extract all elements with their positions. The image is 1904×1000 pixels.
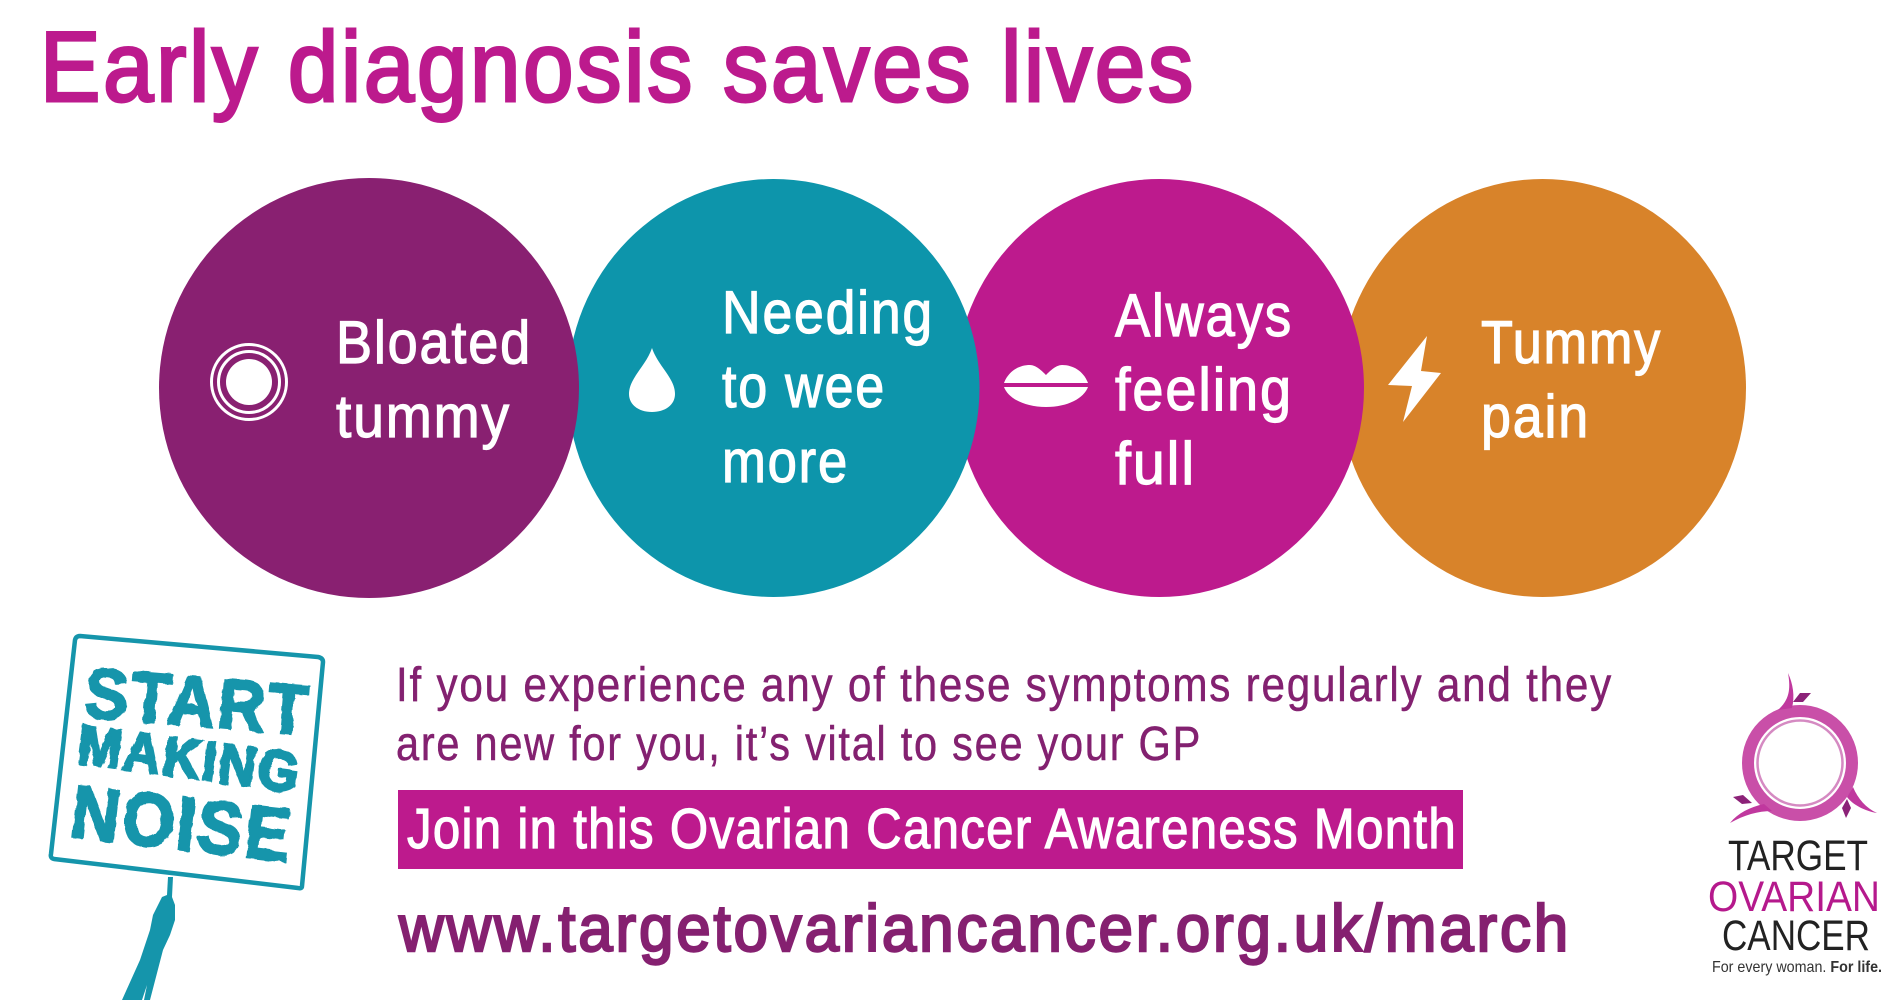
placard text: MAKING [74, 712, 305, 805]
label: needing to wee more: to wee [722, 353, 886, 420]
label: tummy pain: Tummy [1481, 309, 1662, 376]
icon: concentric target [212, 344, 286, 420]
logo tagline: For every woman. For life. [1712, 959, 1882, 976]
label: tummy pain: pain [1481, 383, 1590, 450]
logo: target ovarian cancer [1708, 673, 1882, 976]
body text: are new for you, it’s vital to see your GP [396, 718, 1202, 771]
title: Early diagnosis saves lives [40, 11, 1196, 122]
label: bloated tummy: Bloated [336, 309, 532, 376]
placard text: NOISE [67, 769, 297, 878]
logo wordmark: CANCER [1722, 912, 1870, 960]
body text: If you experience any of these symptoms regularly and they [396, 659, 1613, 712]
placard stick and hand [122, 877, 175, 1000]
placard: start making noise [51, 636, 323, 1000]
logo wordmark: TARGET [1728, 832, 1868, 880]
website url: www.targetovariancancer.org.uk/march [398, 891, 1571, 965]
panel: symptom circles [159, 178, 1746, 598]
panel: tummy pain [1339, 179, 1746, 597]
label: always feeling full: full [1115, 430, 1196, 497]
icon: lightning bolt [1388, 336, 1441, 422]
placard text: START [82, 654, 313, 751]
logo ring emblem [1730, 673, 1877, 823]
banner: awareness month: Join in this Ovarian Cancer Awareness Month [407, 797, 1457, 861]
panel: always feeling full [955, 179, 1364, 597]
label: bloated tummy: tummy [336, 383, 511, 450]
panel: needing to wee more [568, 179, 980, 597]
placard board [51, 636, 323, 888]
label: always feeling full: feeling [1115, 356, 1293, 423]
label: needing to wee more: more [722, 428, 849, 495]
icon: water drop [629, 348, 675, 412]
placard text [67, 654, 313, 878]
icon: lips [1004, 365, 1088, 407]
label: needing to wee more: Needing [722, 279, 934, 346]
panel: bloated tummy [159, 178, 579, 598]
label: always feeling full: Always [1115, 282, 1293, 349]
logo wordmark: OVARIAN [1708, 873, 1880, 921]
